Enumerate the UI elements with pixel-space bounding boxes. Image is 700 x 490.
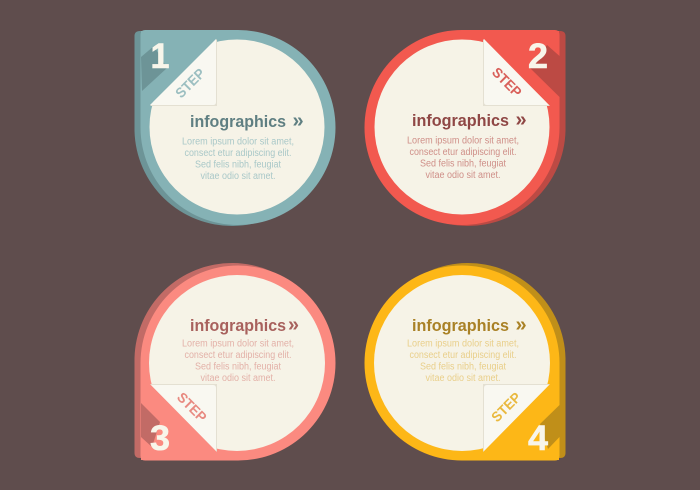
body text: consect etur adipiscing elit. — [410, 350, 516, 361]
body text: consect etur adipiscing elit. — [184, 148, 292, 159]
chevrons: » — [516, 314, 527, 336]
step label: STEP — [174, 389, 210, 425]
body text: Lorem ipsum dolor sit amet, — [182, 338, 294, 350]
corner wedge — [141, 385, 217, 460]
number: 2 — [528, 37, 548, 76]
depth shape — [371, 263, 566, 458]
folded corner shadow — [150, 39, 217, 106]
body text: vitae odio sit amet. — [426, 373, 500, 384]
main teardrop — [140, 30, 336, 225]
corner band — [540, 405, 560, 449]
corner wedge — [483, 385, 559, 460]
depth shape — [134, 263, 329, 458]
body text: consect etur adipiscing elit. — [184, 350, 292, 361]
depth shape — [371, 31, 566, 226]
inner circle — [374, 40, 550, 214]
folded corner — [484, 385, 549, 451]
corner band — [141, 403, 160, 447]
step label: STEP — [488, 389, 524, 425]
inner circle — [150, 40, 324, 214]
chevrons: » — [292, 110, 304, 132]
body text: Lorem ipsum dolor sit amet, — [407, 338, 519, 350]
panel: step 1 — [134, 30, 336, 226]
chevrons: » — [288, 314, 299, 336]
body text: Lorem ipsum dolor sit amet, — [407, 136, 519, 146]
depth shape — [134, 31, 329, 226]
number: 1 — [150, 37, 170, 76]
body text: Sed felis nibh, feugiat — [420, 362, 506, 372]
corner wedge — [483, 31, 559, 105]
body text — [182, 338, 294, 384]
panel: step 3 — [134, 263, 336, 460]
inner circle — [374, 275, 550, 451]
body text: vitae odio sit amet. — [200, 171, 276, 182]
corner band — [141, 46, 167, 91]
step label: STEP — [172, 65, 208, 101]
body text: Sed felis nibh, feugiat — [195, 362, 281, 372]
folded corner — [484, 39, 549, 105]
panel: step 2 — [364, 30, 566, 226]
body text — [182, 136, 294, 182]
folded corner shadow — [483, 39, 550, 106]
body text — [407, 338, 519, 384]
body text: vitae odio sit amet. — [200, 373, 276, 384]
body text: vitae odio sit amet. — [426, 170, 500, 181]
heading: infographics — [190, 316, 286, 335]
corner band — [530, 45, 560, 97]
body text: Lorem ipsum dolor sit amet, — [182, 136, 294, 148]
folded corner — [150, 39, 216, 105]
number: 4 — [528, 419, 549, 458]
folded corner — [151, 385, 216, 451]
number: 3 — [150, 419, 170, 458]
body text: consect etur adipiscing elit. — [410, 147, 516, 158]
step label: STEP — [489, 64, 525, 100]
heading: infographics — [190, 112, 286, 131]
body text: Sed felis nibh, feugiat — [195, 160, 281, 170]
heading: infographics — [412, 316, 509, 335]
heading: infographics — [412, 111, 509, 130]
main teardrop — [364, 266, 560, 460]
folded corner shadow — [150, 384, 217, 452]
inner circle — [149, 275, 325, 451]
corner wedge — [141, 31, 217, 105]
main teardrop — [140, 266, 336, 460]
body text: Sed felis nibh, feugiat — [420, 158, 506, 170]
panel: step 4 — [364, 263, 566, 460]
main teardrop — [364, 30, 560, 225]
body text — [407, 136, 519, 181]
folded corner shadow — [483, 384, 550, 452]
chevrons: » — [516, 109, 527, 131]
